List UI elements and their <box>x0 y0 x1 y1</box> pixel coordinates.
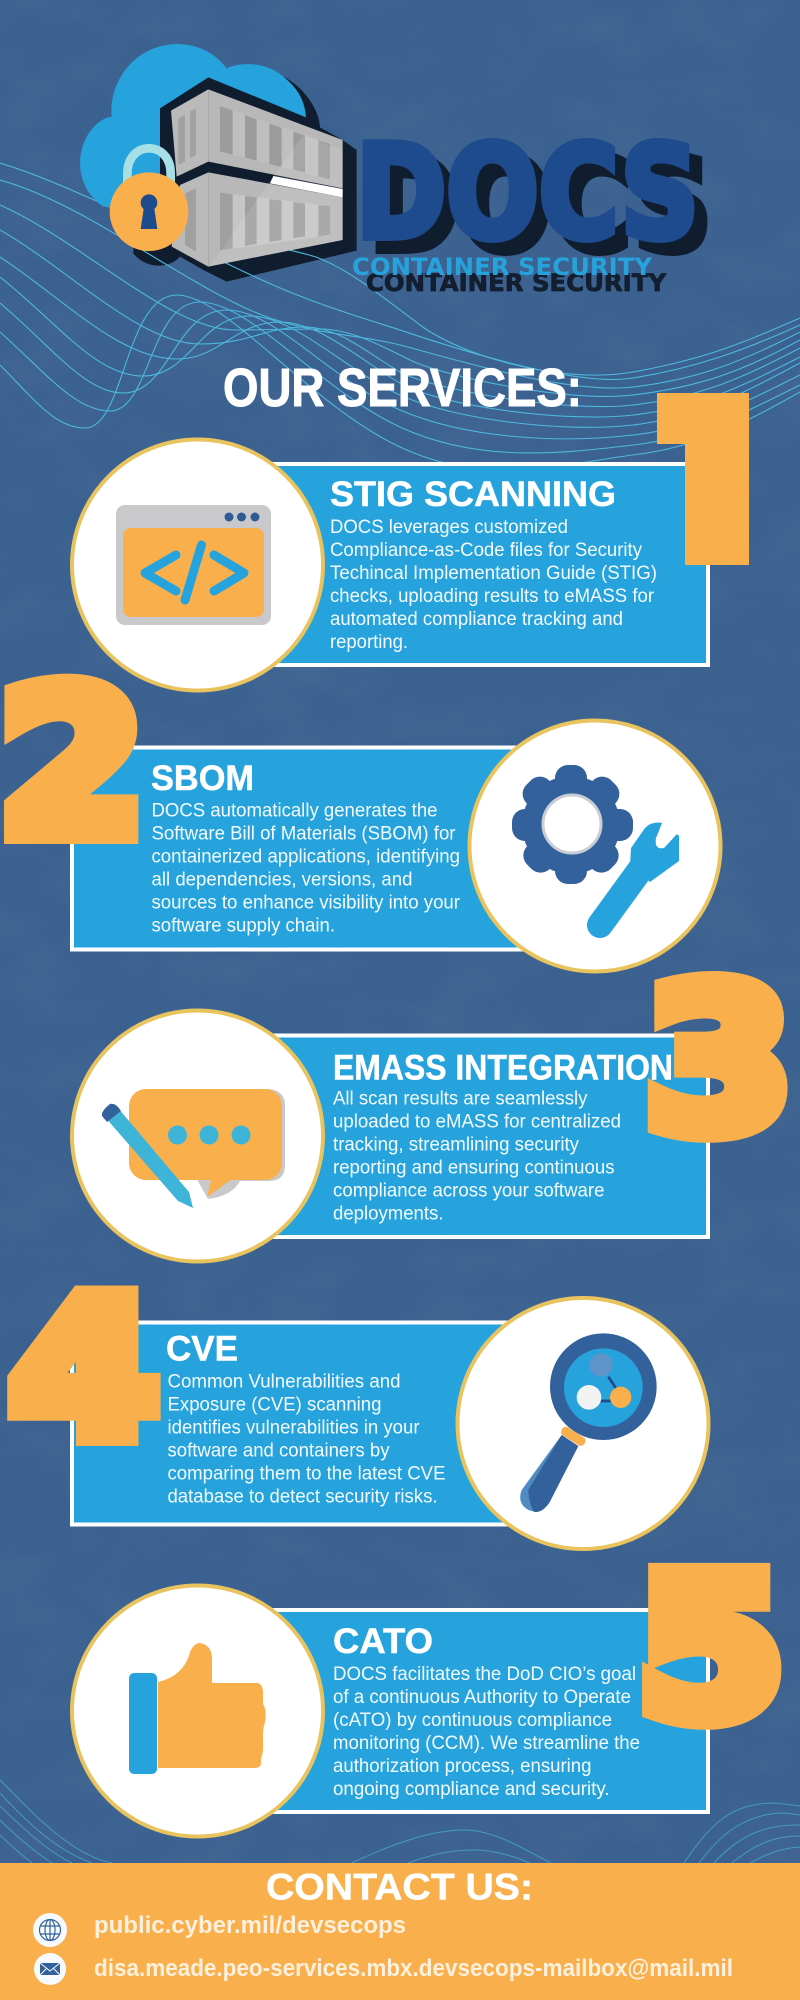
panel text: Compliance-as-Code files for Security <box>330 540 642 561</box>
panel text: checks, uploading results to eMASS for <box>330 586 655 607</box>
panel text: authorization process, ensuring <box>333 1756 592 1777</box>
panel text: DOCS facilitates the DoD CIO’s goal <box>333 1664 636 1685</box>
panel box <box>252 1036 708 1237</box>
panel: eMASS integration <box>72 1010 708 1262</box>
panel text <box>168 1372 446 1508</box>
icon: gear and wrench <box>512 765 679 925</box>
icon circle <box>72 440 323 690</box>
panel text: deployments. <box>333 1204 444 1224</box>
panel heading: SBOM <box>151 759 254 798</box>
panel heading: CATO <box>333 1622 433 1661</box>
panel text: identifies vulnerabilities in your <box>168 1418 420 1438</box>
panel box <box>252 1610 708 1812</box>
icon circle <box>72 1586 323 1836</box>
panel text <box>333 1664 640 1800</box>
icon circle <box>458 1298 708 1549</box>
icon: globe <box>33 1913 67 1947</box>
panel: STIG scanning <box>72 440 708 690</box>
icon: thumbs up <box>129 1643 266 1774</box>
email link: disa.meade.peo-services.mbx.devsecops-mailbox@mail.mil <box>94 1955 733 1982</box>
panel text: software supply chain. <box>152 916 335 936</box>
panel text: (cATO) by continuous compliance <box>333 1710 612 1731</box>
website link: public.cyber.mil/devsecops <box>94 1912 406 1939</box>
icon: cloud, container and padlock <box>80 44 343 267</box>
subtitle: CONTAINER SECURITY: CONTAINER SECURITY <box>352 253 653 281</box>
icon: magnifier <box>520 1333 657 1512</box>
panel text: all dependencies, versions, and <box>152 870 412 890</box>
panel text: compliance across your software <box>333 1180 604 1202</box>
panel text <box>152 800 461 936</box>
panel text: ongoing compliance and security. <box>333 1779 610 1800</box>
panel box <box>72 1322 532 1524</box>
panel text: reporting. <box>330 632 408 653</box>
heading: contact us: CONTACT US: <box>266 1866 533 1908</box>
panel text: software and containers by <box>168 1440 390 1462</box>
number 5: 5 <box>638 1535 784 1762</box>
icon: code window <box>116 505 271 625</box>
icon: chat bubble and pencil <box>102 1089 285 1208</box>
icon circle <box>470 720 720 972</box>
panel text: All scan results are seamlessly <box>333 1088 588 1110</box>
heading: our services: OUR SERVICES: <box>223 358 582 418</box>
panel box <box>72 748 542 950</box>
panel text: Common Vulnerabilities and <box>168 1372 400 1392</box>
icon: envelope <box>34 1953 66 1985</box>
panel text: comparing them to the latest CVE <box>168 1464 446 1484</box>
footer: contact <box>0 1863 800 2000</box>
number 3: 3 <box>645 946 793 1176</box>
icon circle <box>72 1010 323 1262</box>
panel heading: EMASS INTEGRATION <box>333 1048 673 1088</box>
panel text <box>333 1088 621 1224</box>
title shadow: DOCS: DOCS <box>369 132 712 281</box>
panel text: containerized applications, identifying <box>152 846 460 868</box>
panel text: reporting and ensuring continuous <box>333 1158 614 1178</box>
panel text: uploaded to eMASS for centralized <box>333 1112 621 1132</box>
panel text <box>330 517 657 653</box>
footer band <box>0 1863 800 2000</box>
panel text: automated compliance tracking and <box>330 609 623 630</box>
wave lines bottom <box>0 1780 800 1863</box>
panel text: DOCS automatically generates the <box>152 800 438 822</box>
panel: CVE <box>72 1298 708 1549</box>
panel text: DOCS leverages customized <box>330 517 568 538</box>
panel: SBOM <box>72 720 720 972</box>
number 4: 4 <box>10 1259 158 1480</box>
number 2: 2 <box>0 649 145 881</box>
panel text: database to detect security risks. <box>168 1486 438 1508</box>
panel text: sources to enhance visibility into your <box>152 892 461 914</box>
subtitle shadow: CONTAINER SECURITY: CONTAINER SECURITY <box>366 269 667 297</box>
wave lines top <box>0 163 800 470</box>
panel text: Exposure (CVE) scanning <box>168 1394 382 1416</box>
logo shadow <box>133 77 357 282</box>
panel text: of a continuous Authority to Operate <box>333 1687 631 1708</box>
panel text: monitoring (CCM). We streamline the <box>333 1733 640 1754</box>
panel text: Software Bill of Materials (SBOM) for <box>152 824 456 844</box>
panel box <box>252 464 708 665</box>
panel heading: CVE <box>166 1330 238 1368</box>
panel heading: STIG SCANNING <box>330 475 616 514</box>
panel: cATO <box>72 1586 708 1836</box>
title: DOCS: DOCS <box>356 119 699 268</box>
panel text: Techincal Implementation Guide (STIG) <box>330 563 657 584</box>
panel text: tracking, streamlining security <box>333 1134 579 1156</box>
logo <box>80 44 712 297</box>
